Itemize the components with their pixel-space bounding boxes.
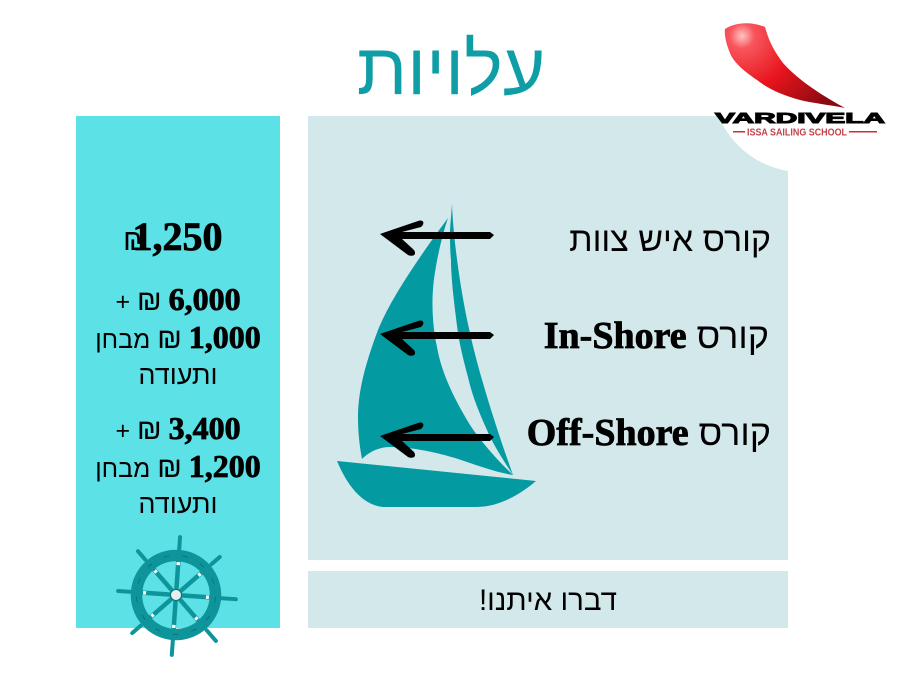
- arrow: course 2: [380, 320, 494, 356]
- price: In-Shore: [95, 281, 261, 390]
- arrow: course 3: [380, 422, 494, 458]
- price: Off-Shore: [95, 410, 261, 519]
- arrow: course 1: [380, 220, 494, 256]
- price: In-Shore: ותעודה: [138, 360, 218, 390]
- price: In-Shore: 6,000 ₪ +: [115, 281, 241, 317]
- panel: courses: [308, 116, 788, 560]
- price: Off-Shore: ותעודה: [138, 489, 218, 519]
- title: עלויות: [357, 29, 545, 110]
- panel: contact us: [308, 571, 788, 628]
- price: Off-Shore: 1,200 ₪ מבחן: [95, 448, 261, 484]
- price: In-Shore: 1,000 ₪ מבחן: [95, 319, 261, 355]
- contact text: דברו איתנו!: [479, 584, 617, 617]
- price: deckhand: ₪1,250: [123, 214, 222, 259]
- logo: ISSA SAILING SCHOOL: [747, 128, 847, 138]
- price: Off-Shore: 3,400 ₪ +: [115, 410, 241, 446]
- icon: ship wheel: [116, 535, 238, 657]
- course label: In-Shore: קורס In-Shore: [544, 315, 769, 357]
- logo: VARDIVELA: [715, 111, 886, 127]
- course label: deckhand: קורס איש צוות: [569, 221, 771, 259]
- logo: [714, 23, 886, 171]
- panel: prices: [76, 116, 280, 628]
- course label: Off-Shore: קורס Off-Shore: [527, 412, 771, 454]
